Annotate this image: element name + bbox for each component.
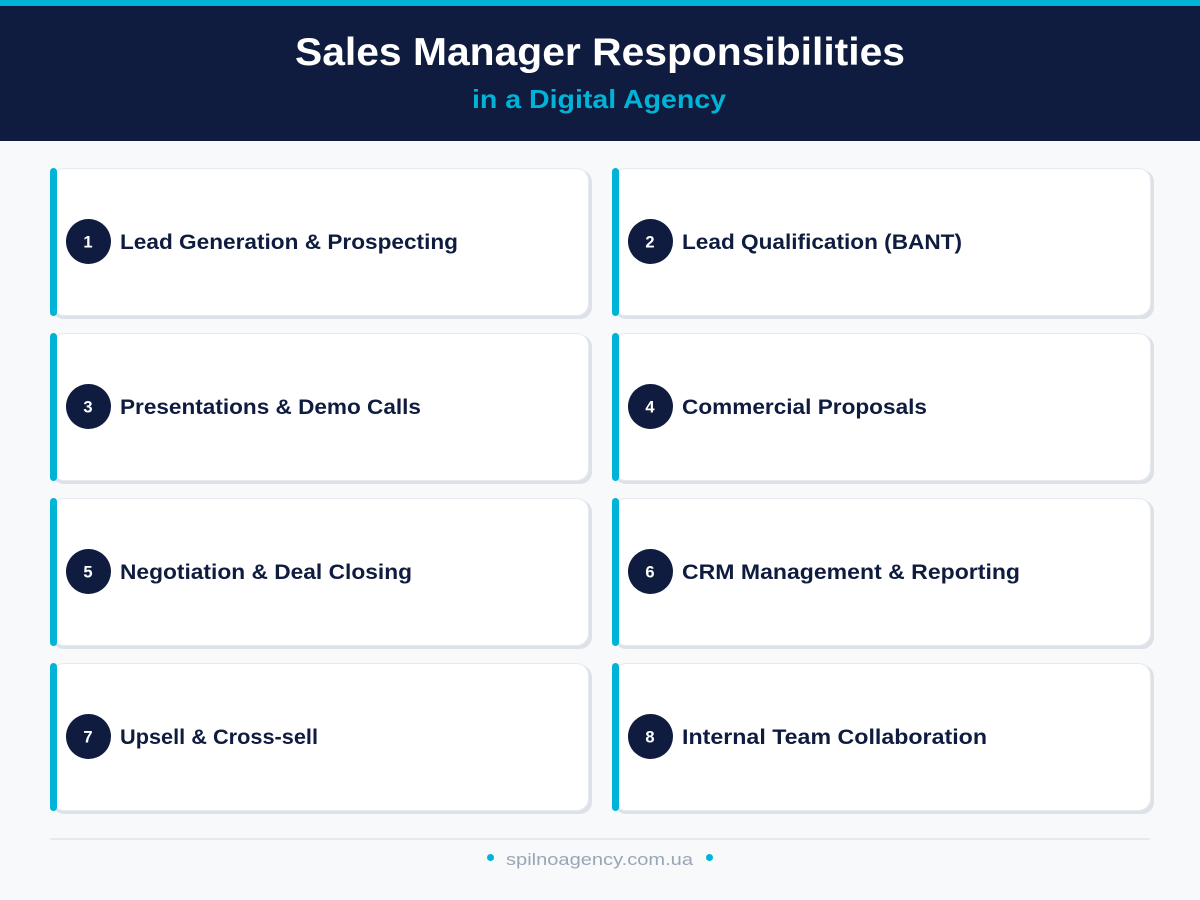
card 8: Internal Team Collaboration: 8 xyxy=(645,728,655,746)
icon: left dot xyxy=(487,854,494,861)
card 8: Internal Team Collaboration: Internal Team Collaboration xyxy=(682,725,987,749)
card 5: Negotiation & Deal Closing: Negotiation & Deal Closing xyxy=(120,560,412,584)
card 4: Commercial Proposals: 4 xyxy=(645,398,655,416)
card 5: Negotiation & Deal Closing: 5 xyxy=(83,564,93,582)
card 7: Upsell & Cross-sell: 7 xyxy=(83,728,93,746)
card 7: Upsell & Cross-sell: Upsell & Cross-sell xyxy=(120,725,318,749)
card 3: Presentations & Demo Calls xyxy=(50,333,592,484)
card 7: Upsell & Cross-sell xyxy=(50,663,592,814)
footer xyxy=(487,850,713,869)
subtitle: in a Digital Agency xyxy=(472,84,727,114)
card 6: CRM Management & Reporting: 6 xyxy=(645,564,655,582)
card 6: CRM Management & Reporting xyxy=(612,498,1154,649)
card 2: Lead Qualification (BANT): 2 xyxy=(645,234,655,252)
card 5: Negotiation & Deal Closing xyxy=(50,498,592,649)
card 3: Presentations & Demo Calls: Presentations & Demo Calls xyxy=(120,395,421,419)
header xyxy=(0,0,1200,141)
card 2: Lead Qualification (BANT): Lead Qualification (BANT) xyxy=(682,230,962,254)
card 6: CRM Management & Reporting: CRM Management & Reporting xyxy=(682,560,1020,584)
card 4: Commercial Proposals xyxy=(612,333,1154,484)
card 3: Presentations & Demo Calls: 3 xyxy=(83,398,93,416)
card 1: Lead Generation & Prospecting: 1 xyxy=(83,234,93,252)
card 1: Lead Generation & Prospecting xyxy=(50,168,592,319)
card 8: Internal Team Collaboration xyxy=(612,663,1154,814)
icon: right dot xyxy=(706,854,713,861)
card 2: Lead Qualification (BANT) xyxy=(612,168,1154,319)
footer url: spilnoagency.com.ua xyxy=(506,850,694,869)
card 1: Lead Generation & Prospecting: Lead Generation & Prospecting xyxy=(120,230,458,254)
card 4: Commercial Proposals: Commercial Proposals xyxy=(682,395,927,419)
title: Sales Manager Responsibilities xyxy=(295,31,905,74)
